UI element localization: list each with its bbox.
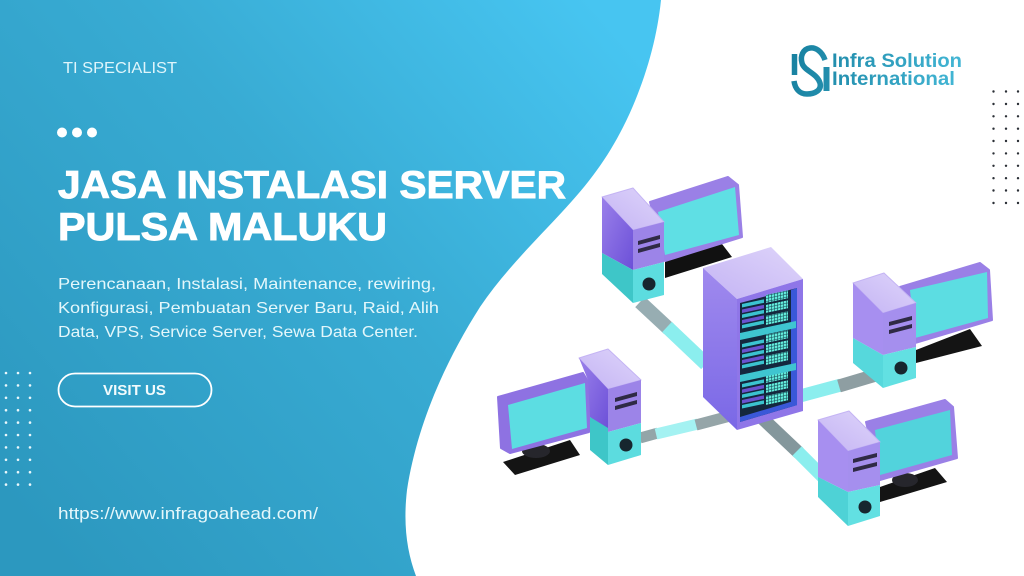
service description paragraph: Perencanaan, Instalasi, Maintenance, rewiring, — [58, 276, 436, 293]
logo wordmark: International — [832, 68, 955, 90]
tower base — [602, 253, 633, 303]
tower — [602, 188, 664, 230]
logo wordmark: Infra Solution — [832, 50, 962, 72]
rack interior — [740, 288, 797, 422]
monitor stand — [503, 440, 580, 475]
rack shelf: lower — [740, 363, 796, 382]
heading — [58, 164, 566, 249]
monitor stand — [880, 468, 947, 502]
rack modules: lower — [742, 370, 788, 410]
tower base — [818, 477, 848, 526]
rack shelf: upper — [740, 321, 796, 340]
logo wordmark — [832, 50, 962, 90]
decorative dot grid: right — [992, 90, 1019, 204]
logo: Infra Solution International — [794, 48, 962, 94]
rack modules: upper — [742, 290, 788, 330]
cable: top-left computer to server — [640, 302, 706, 364]
computer: bottom left — [498, 349, 641, 475]
computer: bottom right — [818, 400, 957, 526]
background: blue curved panel — [0, 0, 661, 576]
website URL: https://www.infragoahead.com/ — [58, 504, 318, 523]
service description paragraph — [58, 276, 439, 341]
monitor stand — [916, 329, 982, 363]
eyebrow: TI SPECIALIST: TI SPECIALIST — [63, 60, 177, 77]
tower — [853, 273, 916, 313]
monitor — [866, 400, 957, 480]
central server rack — [703, 247, 803, 430]
decorative dot grid: left — [5, 372, 31, 486]
heading: PULSA MALUKU — [58, 206, 387, 249]
service description paragraph: Data, VPS, Service Server, Sewa Data Center. — [58, 324, 418, 341]
tower base — [853, 338, 883, 388]
tower — [818, 411, 880, 451]
computer: top left — [602, 177, 742, 303]
rack body — [703, 247, 803, 299]
tower base — [590, 417, 608, 465]
network illustration — [498, 177, 992, 526]
three white dots — [57, 128, 97, 138]
monitor — [498, 373, 589, 453]
monitor — [650, 177, 742, 261]
monitor — [900, 263, 992, 343]
button: VISIT US: VISIT US — [103, 382, 166, 399]
computer: right — [853, 263, 992, 388]
service description paragraph: Konfigurasi, Pembuatan Server Baru, Raid, Alih — [58, 300, 439, 317]
cable: bottom-left computer to server — [640, 416, 730, 438]
tower — [579, 349, 641, 389]
monitor stand — [665, 244, 732, 278]
cable: bottom-right computer to server — [762, 418, 826, 480]
button: VISIT US — [58, 374, 212, 406]
cable: right computer to server — [800, 375, 876, 396]
logo mark — [794, 48, 826, 94]
rack modules: middle — [742, 330, 788, 370]
heading: JASA INSTALASI SERVER — [58, 164, 566, 207]
